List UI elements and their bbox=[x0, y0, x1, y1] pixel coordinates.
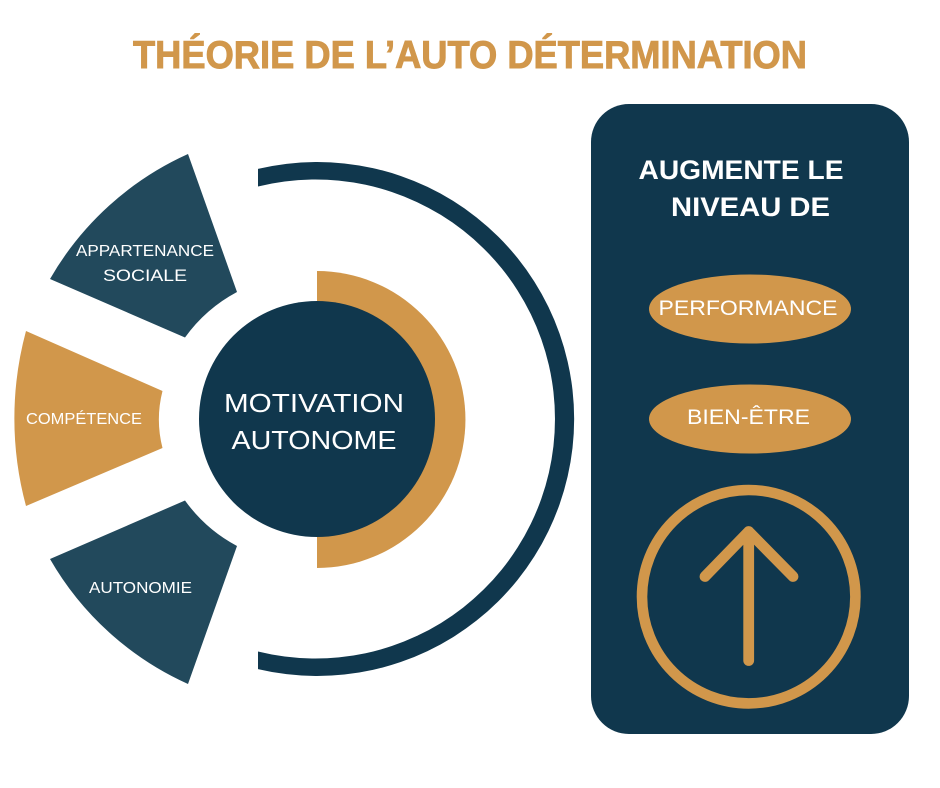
pill: performance bbox=[649, 274, 851, 344]
panel heading: NIVEAU DE bbox=[671, 192, 830, 222]
segment: appartenance sociale bbox=[50, 154, 237, 338]
segment: autonomie bbox=[50, 500, 237, 684]
central circle bbox=[199, 301, 435, 537]
segment: compétence: COMPÉTENCE bbox=[26, 411, 142, 428]
central circle: MOTIVATION bbox=[224, 388, 404, 418]
segment: appartenance sociale: SOCIALE bbox=[103, 266, 187, 285]
title: THÉORIE DE L’AUTO DÉTERMINATION bbox=[133, 33, 807, 77]
panel: augmente le niveau de bbox=[591, 104, 909, 734]
panel heading bbox=[638, 155, 844, 222]
central circle: AUTONOME bbox=[232, 425, 396, 455]
pill: performance: PERFORMANCE bbox=[658, 297, 838, 320]
segment: autonomie: AUTONOMIE bbox=[89, 580, 192, 597]
panel heading: AUGMENTE LE bbox=[638, 155, 844, 185]
segment: compétence bbox=[14, 331, 163, 506]
outer arc bbox=[258, 162, 574, 676]
icon: up arrow in circle bbox=[642, 490, 855, 703]
inner gold half ring bbox=[317, 271, 465, 568]
pill: bien-être: BIEN-ÊTRE bbox=[687, 406, 810, 429]
pill: bien-être bbox=[649, 384, 851, 454]
segment: appartenance sociale: APPARTENANCE bbox=[76, 243, 214, 260]
